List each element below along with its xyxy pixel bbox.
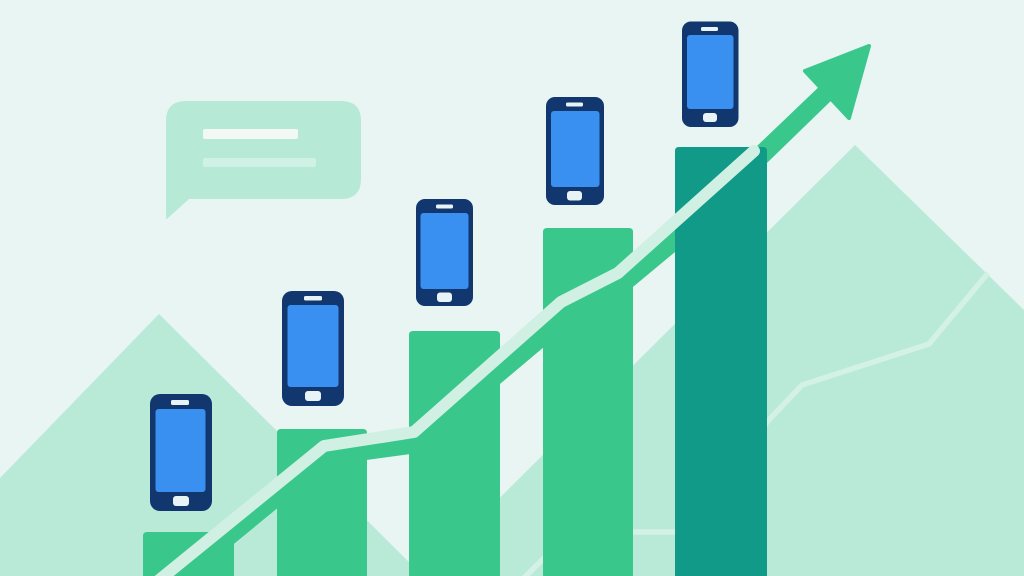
light arrow highlight line [158, 151, 754, 576]
bubble text line 2 [203, 158, 316, 167]
phone 5 [682, 22, 738, 127]
faint background trend line [522, 273, 988, 576]
bubble body [166, 101, 361, 219]
phone 1 [150, 394, 212, 511]
speech bubble [166, 101, 361, 219]
arrow shaft [160, 82, 837, 576]
bar 5 [675, 147, 767, 576]
arrow head [805, 46, 869, 118]
bar 1 [143, 532, 234, 576]
bar 4 [543, 228, 633, 576]
bubble text line 1 [203, 129, 298, 139]
green growth arrow [160, 46, 869, 576]
right mountain [421, 145, 1024, 576]
phone 4 [546, 97, 604, 205]
left mountain [0, 314, 423, 576]
phone 2 [282, 291, 344, 406]
bar 3 [409, 331, 500, 576]
phone 3 [416, 199, 473, 306]
bar 2 [277, 429, 367, 576]
